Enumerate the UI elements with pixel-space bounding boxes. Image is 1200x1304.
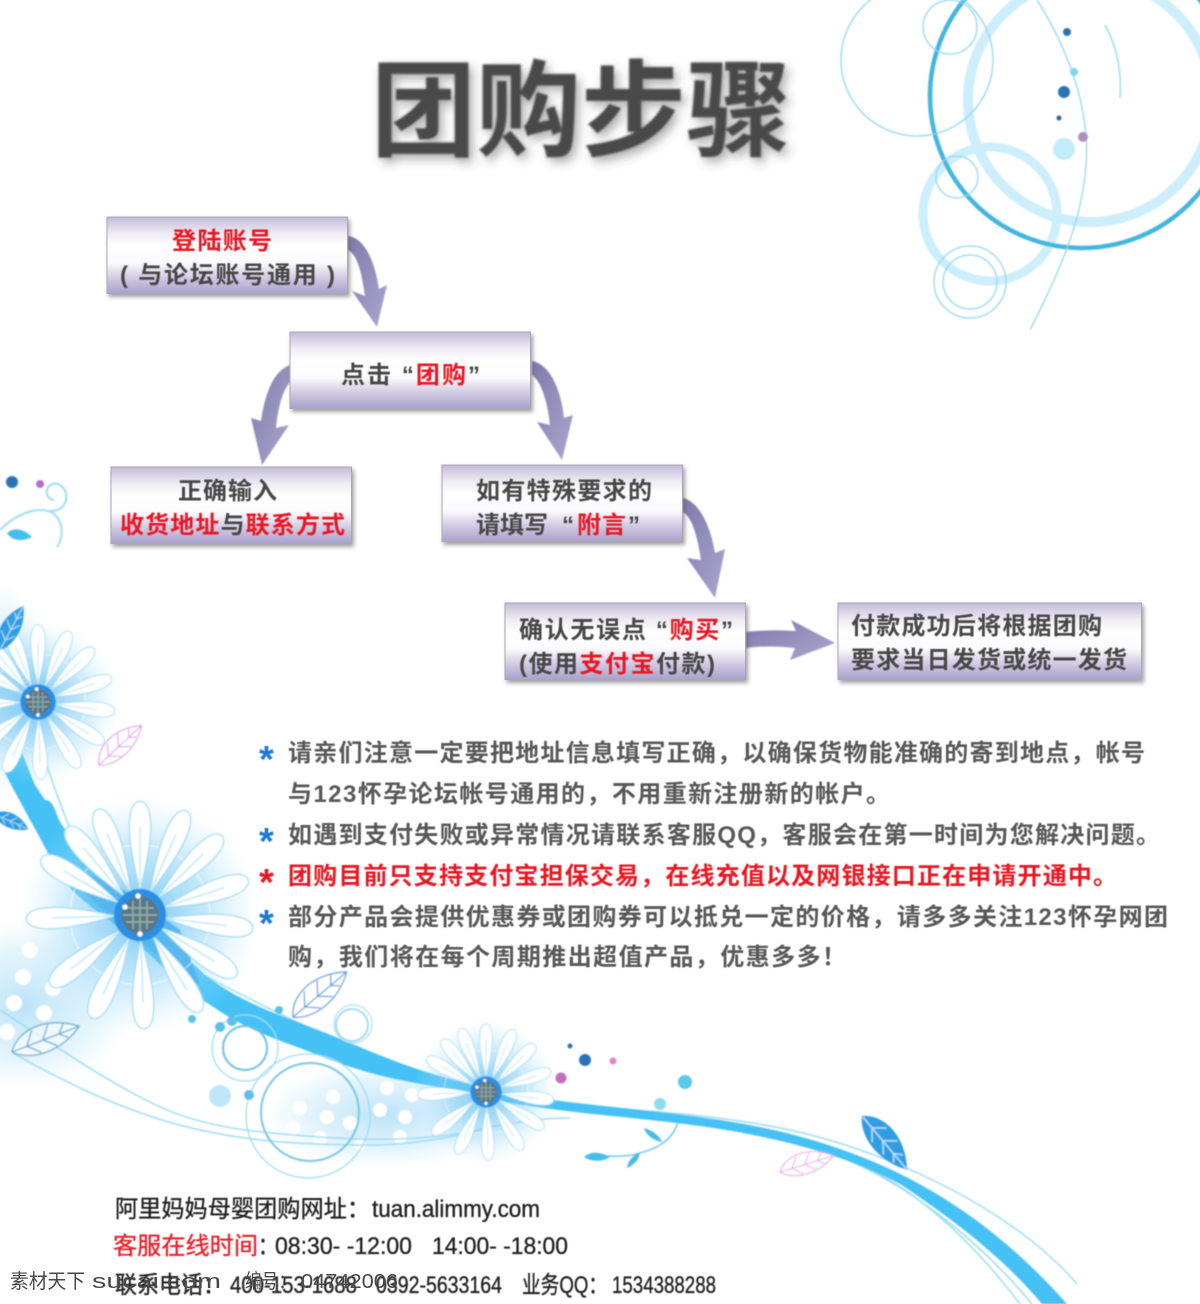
box: after payment: 要求当日发货或统一发货 (851, 647, 1127, 674)
phone line: 0392-5633164 (376, 1272, 502, 1299)
box: after payment (838, 603, 1142, 680)
contact info (113, 1196, 716, 1299)
website line (115, 1196, 540, 1223)
box: login: ( 与论坛账号通用 ) (120, 262, 335, 289)
note 4 (259, 903, 1168, 971)
arrow: login to click (348, 236, 387, 327)
note 2: 如遇到支付失败或异常情况请联系客服QQ，客服会在第一时间为您解决问题。 (288, 821, 1160, 849)
service hours line: 08:30- -12:00 (275, 1233, 412, 1260)
box: special requests (442, 465, 682, 542)
box: enter address: 正确输入 (178, 478, 277, 505)
box: confirm purchase: 确认无误点 “购买” (519, 617, 733, 644)
arrow: click to address (251, 365, 290, 465)
box: login: 登陆账号 (172, 228, 272, 255)
note 1: * (259, 739, 274, 781)
title: 团购步骤 (371, 54, 791, 171)
note 1 (259, 739, 1145, 808)
main blue ribbon (3, 748, 1067, 1304)
box: confirm purchase: (使用支付宝付款) (519, 650, 715, 678)
decoration: top right circles (841, 0, 1200, 330)
watermark: 素材天下 (10, 1270, 85, 1293)
box: enter address: 收货地址与联系方式 (120, 511, 345, 539)
box: click group buy: 点击 “团购” (341, 362, 480, 389)
flowchart (107, 217, 1142, 680)
watermark: 编号： (245, 1270, 295, 1293)
phone line: 联系电话： (115, 1272, 225, 1299)
arrow: remark to buy (683, 498, 725, 598)
box: login (107, 217, 348, 294)
watermark (10, 1270, 398, 1293)
arrow: click to remark (532, 361, 573, 460)
note 2: * (259, 821, 274, 863)
note 4: * (259, 903, 274, 945)
note 2 (259, 821, 1160, 863)
small vine (584, 1122, 678, 1168)
phone line: 1534388288 (612, 1272, 716, 1299)
watermark: 04742006 (301, 1271, 398, 1293)
box: special requests: 附言 (577, 512, 626, 539)
box: special requests: 请填写 (476, 512, 548, 539)
service hours line: ： (258, 1233, 278, 1260)
flower: middle (20, 795, 260, 1035)
circles under ribbon (212, 1005, 372, 1178)
note 3: 团购目前只支持支付宝担保交易，在线充值以及网银接口正在申请开通中。 (288, 862, 1117, 890)
phone line (115, 1272, 716, 1299)
watermark: sucai.com (92, 1271, 221, 1293)
service hours line (113, 1233, 568, 1260)
arrow: buy to payment (746, 620, 835, 660)
background glows (0, 580, 510, 1170)
service hours line: 客服在线时间 (113, 1233, 258, 1260)
note 3 (259, 862, 1117, 904)
box: special requests: ” (628, 512, 640, 539)
note 4: 购，我们将在每个周期推出超值产品，优惠多多！ (288, 944, 846, 971)
decoration: upper left ornament (0, 476, 66, 547)
notes (259, 739, 1168, 971)
decoration: floral swirl (0, 476, 1077, 1304)
phone line: 业务QQ： (522, 1272, 607, 1299)
flower: top (0, 620, 120, 784)
service hours line: 14:00- -18:00 (432, 1233, 568, 1260)
note 1: 与123怀孕论坛帐号通用的，不用重新注册新的帐户。 (288, 781, 890, 808)
box: after payment: 付款成功后将根据团购 (851, 613, 1102, 640)
flower: right (414, 1020, 558, 1164)
box: special requests: 如有特殊要求的 (476, 478, 652, 505)
note 3: * (259, 862, 274, 904)
website line: 阿里妈妈母婴团购网址： (115, 1196, 370, 1223)
dots around ribbon (188, 1006, 692, 1110)
note 4: 部分产品会提供优惠券或团购券可以抵兑一定的价格，请多多关注123怀孕网团 (288, 904, 1168, 931)
box: click group buy (290, 332, 530, 408)
website line: tuan.alimmy.com (372, 1196, 540, 1223)
box: confirm purchase (505, 603, 746, 680)
phone line: 400-153-1688 (230, 1272, 357, 1299)
box: special requests: “ (562, 512, 574, 539)
note 1: 请亲们注意一定要把地址信息填写正确，以确保货物能准确的寄到地点，帐号 (288, 739, 1145, 767)
ribbon dark segment (60, 868, 200, 985)
box: enter address (111, 467, 352, 544)
thin curved lines (0, 760, 1077, 1304)
leaves (0, 601, 918, 1181)
